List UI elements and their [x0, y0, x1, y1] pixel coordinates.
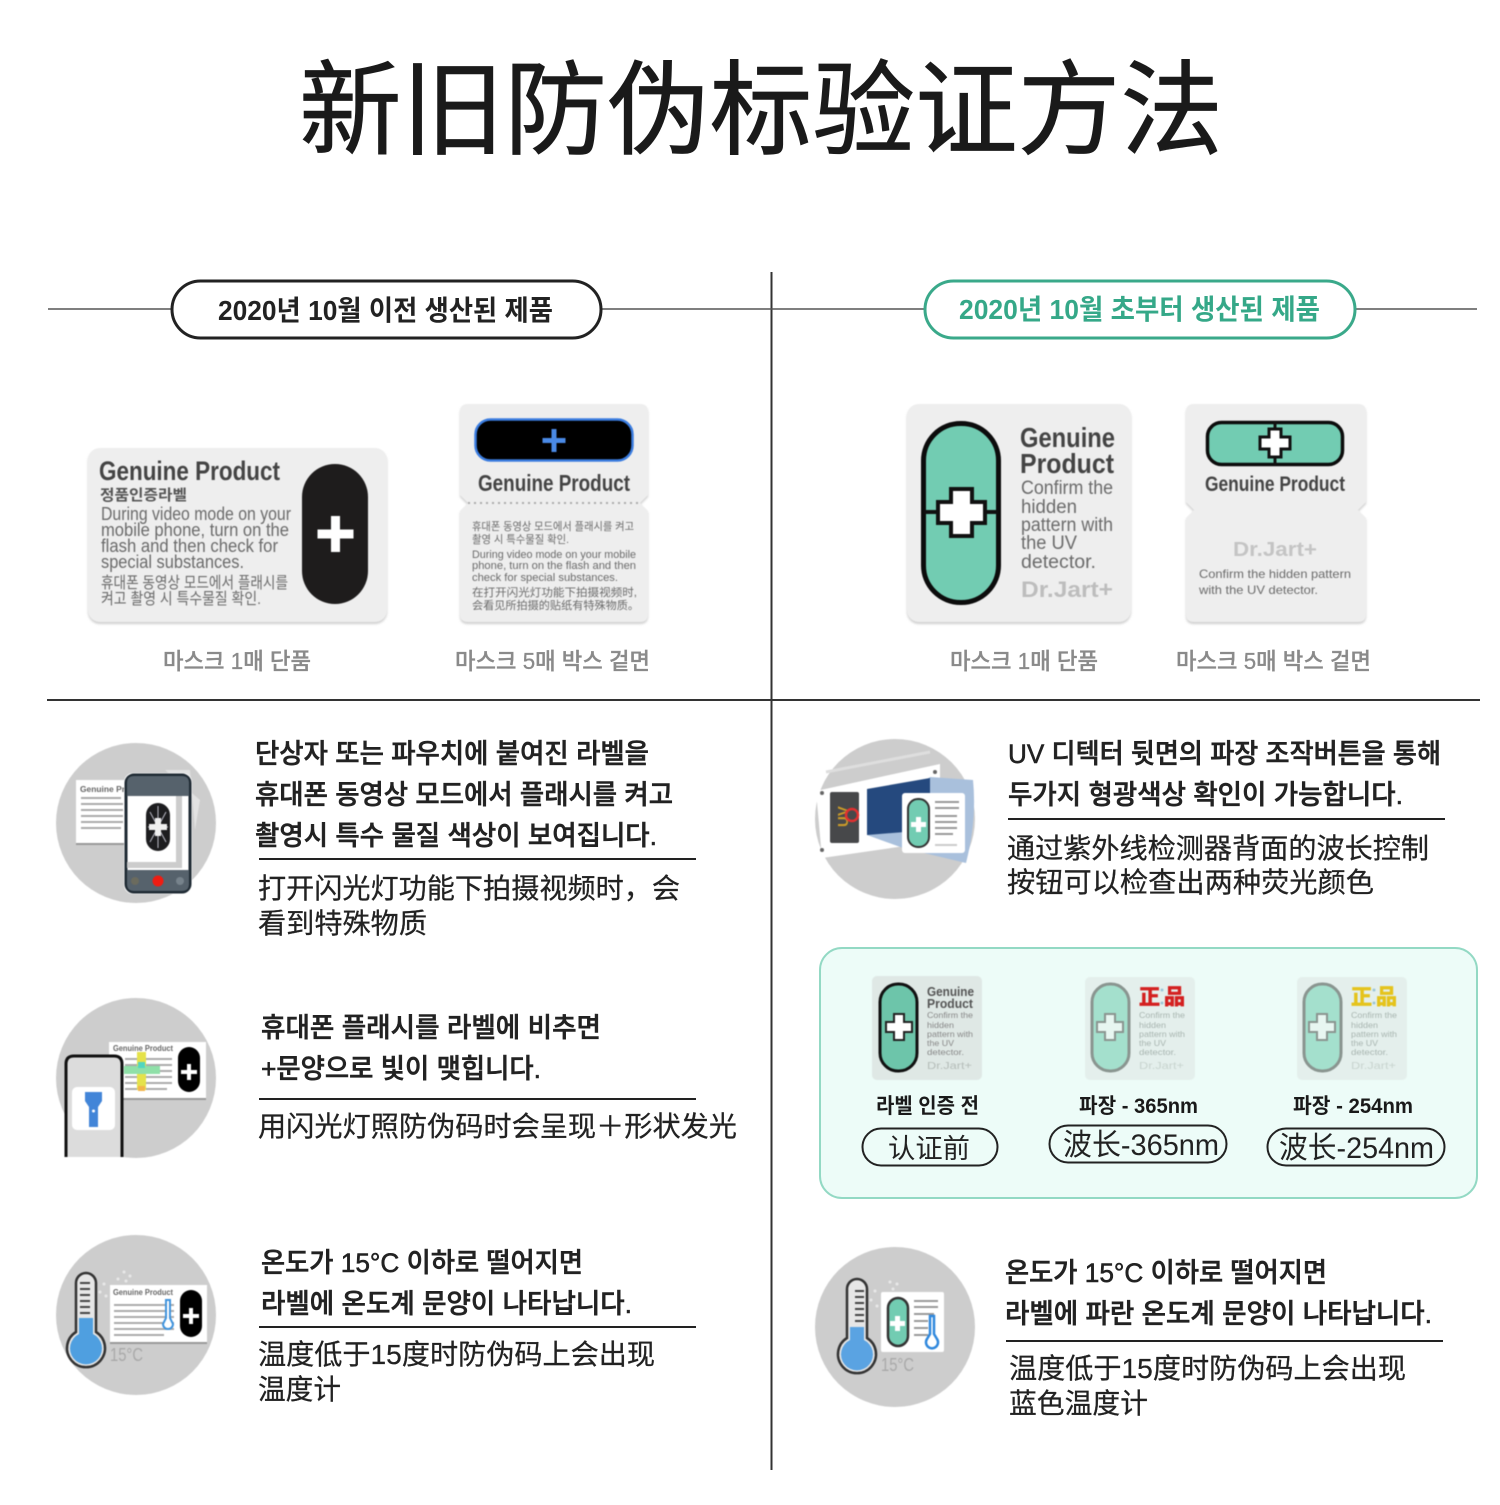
- new single-mask label card: the UV: [1021, 533, 1077, 554]
- old 5-pack box label card: 会看见所拍摄的贴纸有特殊物质。: [472, 598, 639, 612]
- mini label: before verification: Genuine: [927, 984, 974, 999]
- mini label: 365nm: 品: [1164, 986, 1185, 1009]
- mini label: before verification: [872, 976, 982, 1080]
- mini label: 254nm: pattern with: [1351, 1029, 1397, 1039]
- text block: old label temperature: 온도가 15°C 이하로 떨어지면: [261, 1248, 583, 1278]
- text block: flash cross pattern: +문양으로 빛이 맺힙니다.: [261, 1054, 541, 1084]
- caption: new box: 마스크 5매 박스 겉면: [1176, 648, 1371, 674]
- text block: UV detector wavelength: [1007, 739, 1445, 898]
- heading pill: before October 2020: 2020년 10월 이전 생산된 제품: [218, 295, 553, 326]
- text block: flash cross pattern: [258, 1013, 737, 1142]
- icon: thermometer on old label: [56, 1235, 216, 1395]
- text block: old label temperature: 라벨에 온도계 문양이 나타납니다.: [261, 1289, 632, 1319]
- old 5-pack box label card: 在打开闪光灯功能下拍摄视频时,: [472, 585, 637, 599]
- text block: UV detector wavelength: 두가지 형광색상 확인이 가능합니다.: [1008, 780, 1403, 810]
- mini label: 365nm: the UV: [1139, 1038, 1166, 1048]
- pill: wavelength 254: 波长-254nm: [1279, 1132, 1434, 1165]
- old 5-pack box label card: [460, 404, 648, 622]
- icon: phone flashlight on old label: Genuine Product: [113, 1044, 173, 1053]
- mini label: before verification: Product: [927, 996, 974, 1011]
- text block: old label temperature: [258, 1248, 696, 1405]
- old 5-pack box label card: 휴대폰 동영상 모드에서 플래시를 켜고: [472, 520, 634, 533]
- mini label: 365nm: 正: [1139, 986, 1160, 1009]
- icon: thermometer on old label: Genuine Product: [113, 1288, 173, 1297]
- text block: new label temperature: 温度低于15度时防伪码上会出现: [1009, 1353, 1406, 1384]
- old single-mask label card: Genuine Product: [99, 456, 280, 486]
- heading pill: from October 2020: [925, 281, 1355, 338]
- mini label: 254nm: hidden: [1351, 1020, 1378, 1030]
- old single-mask label card: 정품인증라벨: [100, 487, 187, 504]
- mini label: before verification: Confirm the: [927, 1010, 973, 1020]
- new single-mask label card: pattern with: [1021, 515, 1113, 536]
- text block: phone video check: 촬영시 특수 물질 색상이 보여집니다.: [255, 821, 657, 851]
- label captions: [876, 1095, 1413, 1118]
- new 5-pack box label card: with the UV detector.: [1198, 583, 1318, 597]
- old single-mask label card: special substances.: [101, 552, 244, 572]
- old single-mask label card: [88, 448, 387, 622]
- icon: UV detector on new label: [815, 739, 975, 899]
- text block: phone video check: 看到特殊物质: [258, 908, 427, 939]
- pill: before verification: [862, 1128, 998, 1166]
- old 5-pack box label card: 촬영 시 특수물질 확인.: [472, 533, 569, 546]
- old single-mask label card: 켜고 촬영 시 특수물질 확인.: [101, 590, 261, 608]
- icon: thermometer on new label: [815, 1247, 975, 1407]
- label captions: 라벨 인증 전: [876, 1095, 979, 1118]
- mini label: 365nm: hidden: [1139, 1020, 1166, 1030]
- icon: phone filming old label: [56, 743, 216, 903]
- label captions: 파장 - 365nm: [1079, 1095, 1198, 1118]
- icon: UV detector on new label: UV: [835, 806, 852, 827]
- mini label: 254nm: [1297, 977, 1407, 1080]
- new single-mask label card: [907, 404, 1131, 622]
- mini label: before verification: Dr.Jart+: [927, 1061, 972, 1072]
- mini label: before verification: pattern with: [927, 1029, 973, 1039]
- new single-mask label card: Confirm the: [1021, 478, 1113, 499]
- new 5-pack box label card: [1186, 404, 1366, 622]
- text block: phone video check: 휴대폰 동영상 모드에서 플래시를 켜고: [255, 780, 673, 810]
- mini label: 365nm: detector.: [1139, 1047, 1176, 1057]
- mini label: 254nm: detector.: [1351, 1047, 1388, 1057]
- text block: phone video check: 打开闪光灯功能下拍摄视频时，会: [258, 873, 680, 904]
- icon: phone flashlight on old label: [56, 998, 216, 1158]
- text block: flash cross pattern: 用闪光灯照防伪码时会呈现＋形状发光: [258, 1111, 737, 1142]
- label captions: 파장 - 254nm: [1293, 1095, 1413, 1118]
- mini label: before verification: hidden: [927, 1020, 954, 1030]
- heading pill: from October 2020: 2020년 10월 초부터 생산된 제품: [959, 294, 1320, 325]
- text block: new label temperature: [1005, 1258, 1443, 1419]
- old 5-pack box label card: During video mode on your mobile: [472, 549, 636, 561]
- old single-mask label card: During video mode on your: [101, 504, 291, 524]
- icon: phone filming old label: Genuine Pr: [80, 785, 125, 794]
- icon: thermometer on old label: 15°C: [110, 1345, 143, 1365]
- old single-mask label card: mobile phone, turn on the: [101, 520, 289, 540]
- pill: before verification: 认证前: [888, 1134, 970, 1164]
- caption: old box: 마스크 5매 박스 겉면: [455, 648, 650, 674]
- new 5-pack box label card: Genuine Product: [1205, 473, 1345, 496]
- text block: UV detector wavelength: 按钮可以检查出两种荧光颜色: [1007, 867, 1374, 898]
- new single-mask label card: Genuine: [1020, 422, 1115, 453]
- new 5-pack box label card: Confirm the hidden pattern: [1199, 567, 1351, 581]
- old single-mask label card: flash and then check for: [101, 536, 278, 556]
- text block: new label temperature: 온도가 15°C 이하로 떨어지면: [1005, 1258, 1327, 1288]
- pill: wavelength 365: 波长-365nm: [1063, 1129, 1219, 1162]
- title: 新旧防伪标验证方法: [299, 53, 1223, 168]
- mini label: 254nm: the UV: [1351, 1038, 1378, 1048]
- text block: old label temperature: 温度低于15度时防伪码上会出现: [258, 1339, 655, 1370]
- mini label: before verification: the UV: [927, 1038, 954, 1048]
- mini label: 365nm: pattern with: [1139, 1029, 1185, 1039]
- icon: thermometer on new label: 15°C: [881, 1355, 914, 1375]
- mini label: 365nm: Confirm the: [1139, 1010, 1185, 1020]
- text block: phone video check: [255, 739, 696, 939]
- new single-mask label card: Dr.Jart+: [1021, 577, 1113, 602]
- mini label: 254nm: Confirm the: [1351, 1010, 1397, 1020]
- text block: phone video check: 단상자 또는 파우치에 붙여진 라벨을: [255, 739, 649, 769]
- text block: new label temperature: 라벨에 파란 온도계 문양이 나타납니다.: [1005, 1299, 1432, 1329]
- text block: UV detector wavelength: UV 디텍터 뒷면의 파장 조작버튼을 통해: [1008, 739, 1441, 769]
- old 5-pack box label card: Genuine Product: [478, 470, 630, 496]
- text block: UV detector wavelength: 通过紫外线检测器背面的波长控制: [1007, 833, 1429, 864]
- old single-mask label card: 휴대폰 동영상 모드에서 플래시를: [101, 574, 288, 592]
- mini label: 254nm: 正: [1351, 986, 1372, 1009]
- old 5-pack box label card: check for special substances.: [472, 572, 618, 584]
- new single-mask label card: Product: [1020, 448, 1114, 479]
- text block: new label temperature: 蓝色温度计: [1009, 1388, 1148, 1419]
- new single-mask label card: detector.: [1021, 552, 1096, 573]
- text block: old label temperature: 温度计: [258, 1374, 341, 1405]
- mini label: before verification: detector.: [927, 1047, 964, 1057]
- mini label: 254nm: Dr.Jart+: [1351, 1061, 1396, 1072]
- mini label: 365nm: Dr.Jart+: [1139, 1061, 1184, 1072]
- caption: new single mask: 마스크 1매 단품: [950, 648, 1098, 674]
- new single-mask label card: hidden: [1021, 497, 1077, 518]
- caption: old single mask: 마스크 1매 단품: [163, 648, 311, 674]
- heading pill: before October 2020: [172, 281, 601, 338]
- text block: flash cross pattern: 휴대폰 플래시를 라벨에 비추면: [261, 1013, 601, 1043]
- panel: UV wavelength comparison: [820, 948, 1477, 1198]
- old 5-pack box label card: phone, turn on the flash and then: [472, 560, 636, 572]
- mini label: 365nm: [1085, 977, 1195, 1080]
- mini label: 254nm: 品: [1376, 986, 1397, 1009]
- new 5-pack box label card: Dr.Jart+: [1233, 539, 1317, 561]
